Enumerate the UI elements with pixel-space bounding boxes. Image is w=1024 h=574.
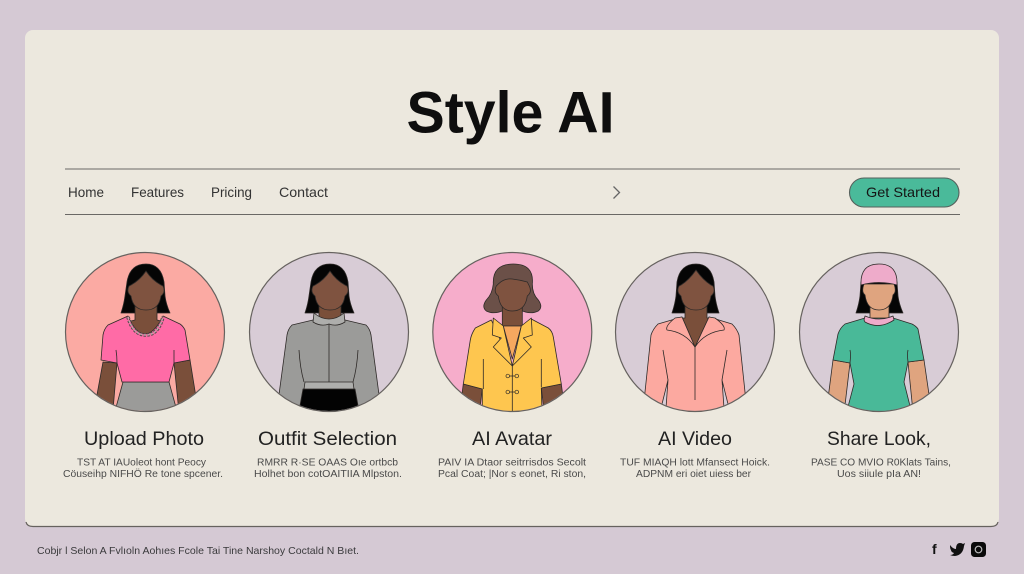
step 1 description xyxy=(63,458,223,480)
navigation bar: Features xyxy=(131,184,184,200)
button: get started xyxy=(850,178,959,207)
step 2 heading: Outfit Selection xyxy=(258,428,397,450)
step 1 description: Cöuseihp NIFHÖ Re tone spcener. xyxy=(63,468,223,480)
step 3 heading: AI Avatar xyxy=(472,428,553,450)
step 5 description: Uos siiule pIa AN! xyxy=(837,469,921,480)
navigation bar: Home xyxy=(68,184,104,200)
icon: instagram xyxy=(971,542,986,557)
footer text: Cobjr l Selon A Fvlıoln Aohıes Fcole Tai Tine Narshoy Coctald N Bıet. xyxy=(37,545,359,557)
icon: chevron xyxy=(614,186,620,198)
step 5: share look illustration xyxy=(800,252,958,422)
icon: twitter bird xyxy=(950,543,965,556)
step 1: upload photo illustration xyxy=(66,252,224,422)
step 4 description: TUF MIAQH lott Mfansect Hoick. xyxy=(620,458,770,468)
step 1 heading: Upload Photo xyxy=(84,428,204,450)
title: Style AI xyxy=(406,80,614,146)
step 2: outfit selection illustration xyxy=(250,252,408,422)
step 5 description: PASE CO MVIO R0Klats Tains, xyxy=(811,458,951,468)
step 2 description: RMRR R·SE OAAS Oıe ortbcb xyxy=(257,458,398,468)
step 4 description: ADPNM eri oiet uiess ber xyxy=(636,469,752,480)
icon: facebook: f xyxy=(932,541,937,557)
step 3: ai avatar illustration xyxy=(433,252,592,422)
navigation bar: Contact xyxy=(279,184,328,200)
step 2 description: Holhet bon cotOAITIIA Mlpston. xyxy=(254,469,402,480)
button: get started: Get Started xyxy=(866,184,940,200)
step 3 description: Pcal Coat; |Nor s eonet, Ri ston, xyxy=(438,469,586,480)
navigation bar xyxy=(68,184,328,200)
step 4 heading: AI Video xyxy=(658,428,732,450)
step 4: ai video illustration xyxy=(616,252,774,422)
step 3 description: PAIV IA Dtaor seitrrisdos Secolt xyxy=(438,458,586,468)
step 5 heading: Share Look, xyxy=(827,428,931,450)
navigation bar: Pricing xyxy=(211,184,252,200)
step 4 description xyxy=(620,458,770,480)
step 5 description xyxy=(811,458,951,480)
step 2 description xyxy=(254,458,402,480)
step 3 description xyxy=(438,458,586,480)
step 1 description: TST AT IAUoleot hont Peocy xyxy=(77,458,206,468)
